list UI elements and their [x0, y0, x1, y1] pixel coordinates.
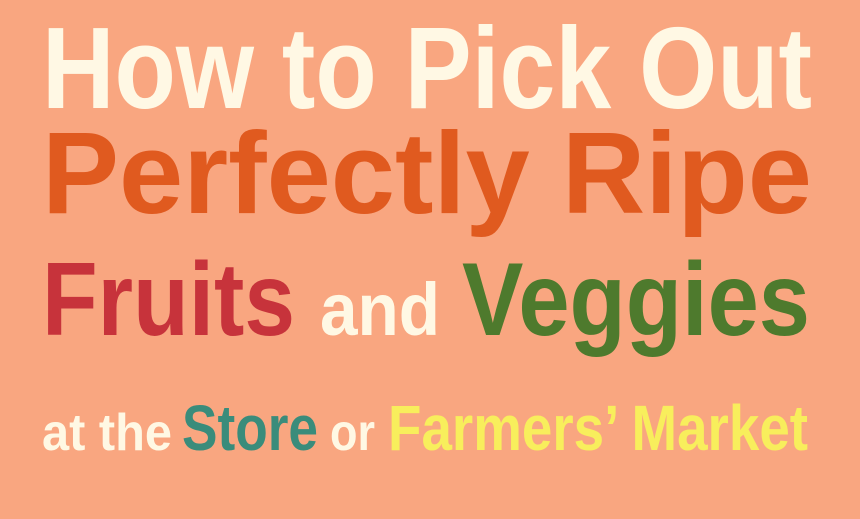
- title line 3: [42, 242, 810, 358]
- title line 2: Perfectly Ripe: [42, 108, 812, 238]
- title line 3: Fruits: [42, 242, 295, 358]
- title line 4: at the: [42, 404, 172, 462]
- title line 3: Veggies: [462, 242, 810, 358]
- title line 4: Store: [182, 392, 318, 464]
- title line 4: [42, 392, 808, 464]
- title line 4: or: [330, 404, 375, 462]
- title line 3: and: [320, 268, 440, 351]
